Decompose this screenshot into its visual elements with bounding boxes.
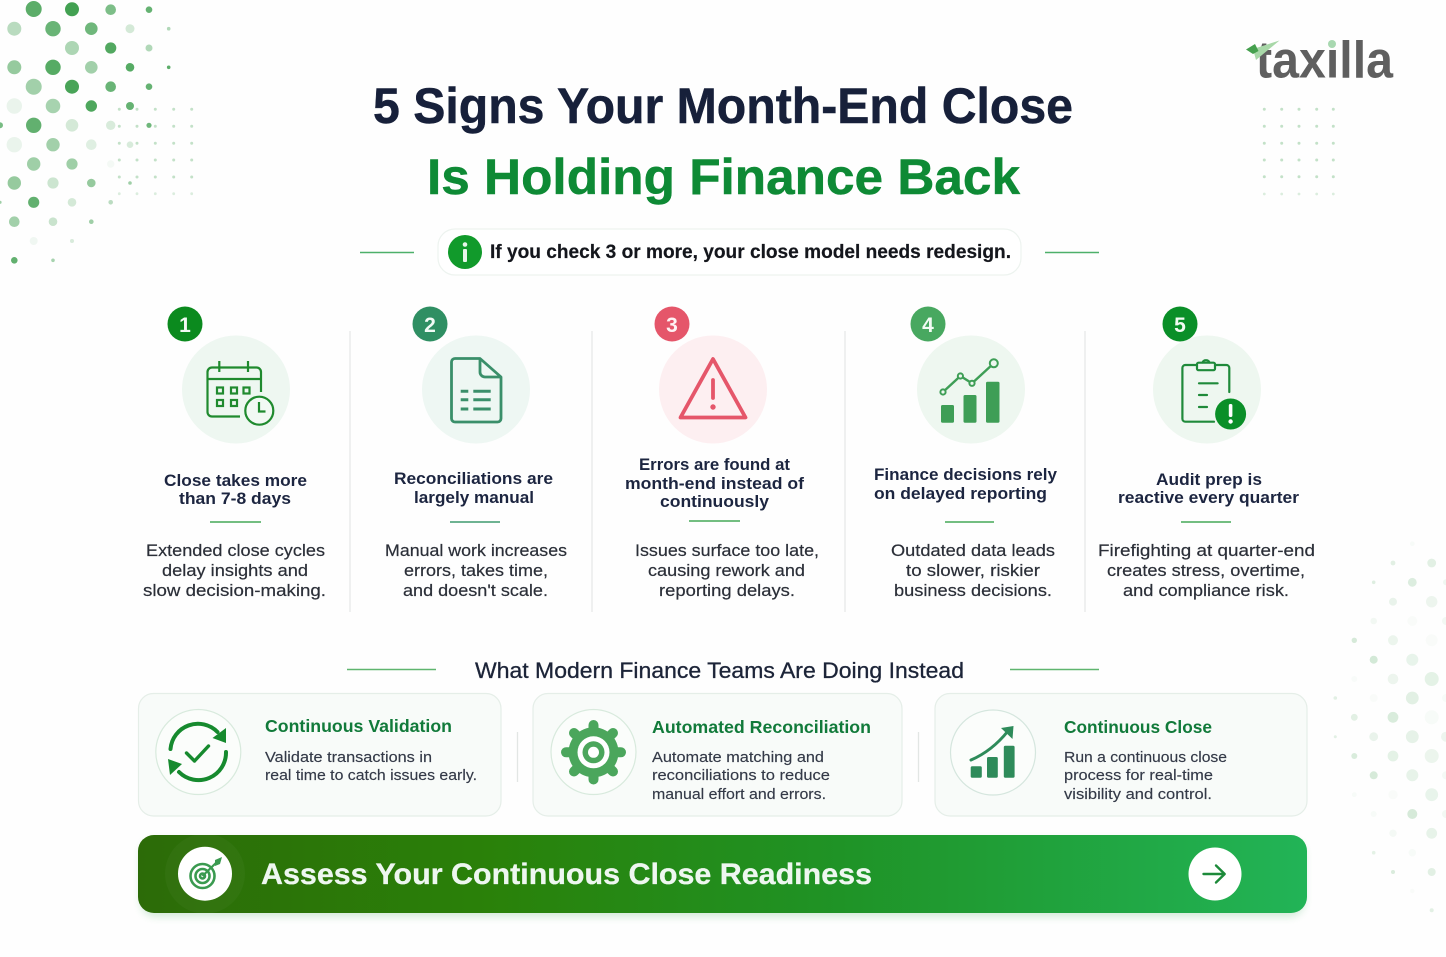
description: and compliance risk.: [1123, 581, 1289, 600]
description: Issues surface too late,: [635, 541, 819, 560]
description: [143, 541, 326, 600]
card text: manual effort and errors.: [652, 786, 826, 803]
heading: Reconciliations are: [394, 469, 553, 488]
icon: document: [452, 358, 501, 422]
number badge 3: 3: [666, 314, 678, 337]
description: [891, 541, 1055, 600]
title: [373, 78, 1073, 205]
card text: visibility and control.: [1064, 786, 1212, 803]
description: reporting delays.: [659, 581, 795, 600]
panel: sign 1: [143, 306, 326, 600]
heading: [394, 469, 553, 507]
card text: reconciliations to reduce: [652, 767, 830, 784]
title: Is Holding Finance Back: [427, 149, 1020, 205]
heading: [164, 471, 307, 508]
description: and doesn't scale.: [403, 581, 548, 600]
description: business decisions.: [894, 581, 1052, 600]
description: [1098, 541, 1315, 600]
logo: taxilla: taxilla: [1256, 32, 1394, 90]
panel: continuous close: [935, 694, 1307, 816]
icon: arrow button: [1188, 848, 1242, 900]
card dividers: [518, 732, 918, 782]
heading: largely manual: [414, 488, 534, 507]
dot pattern: bottom right: [1334, 541, 1446, 912]
heading: [1118, 470, 1299, 507]
callout: checklist threshold: If you check 3 or more, your close model needs redesign.: [490, 242, 1011, 263]
icon: gear: [551, 710, 636, 794]
number badge 1: 1: [179, 314, 191, 337]
dot pattern: top left: [0, 1, 193, 264]
dot pattern: top right: [1263, 108, 1335, 195]
heading: reactive every quarter: [1118, 488, 1299, 507]
description: Manual work increases: [385, 541, 567, 560]
card text: [1064, 749, 1227, 803]
heading: Close takes more: [164, 471, 307, 490]
panel: sign 5: [1098, 306, 1315, 600]
description: to slower, riskier: [906, 561, 1040, 580]
section heading: What Modern Finance Teams Are Doing Instead: [475, 658, 964, 683]
description: Extended close cycles: [146, 541, 325, 560]
number badge 4: 4: [922, 314, 934, 337]
heading: [874, 465, 1058, 503]
description: [635, 541, 819, 600]
card text: process for real-time: [1064, 767, 1213, 784]
description: slow decision-making.: [143, 581, 326, 600]
number badge 2: 2: [424, 314, 436, 337]
icon: calendar with clock: [208, 361, 273, 425]
icon: warning triangle: [680, 359, 746, 418]
description: creates stress, overtime,: [1107, 561, 1305, 580]
column dividers: [350, 331, 1085, 612]
number badge 5: 5: [1174, 314, 1186, 337]
description: Outdated data leads: [891, 541, 1055, 560]
card heading: Automated Reconciliation: [652, 717, 871, 737]
banner text: Assess Your Continuous Close Readiness: [261, 858, 872, 891]
panel: continuous validation: [138, 694, 501, 816]
icon: growth chart: [950, 710, 1036, 795]
description: errors, takes time,: [404, 561, 548, 580]
panel: sign 4: [874, 306, 1058, 600]
card text: Automate matching and: [652, 749, 824, 766]
panel: sign 2: [385, 306, 567, 600]
panel: sign 3: [625, 306, 819, 600]
icon: target: [178, 847, 232, 901]
description: delay insights and: [162, 561, 308, 580]
panel: automated reconciliation: [533, 694, 902, 816]
number badge 5: [1162, 306, 1198, 342]
heading: than 7-8 days: [179, 489, 291, 508]
number badge 2: [412, 306, 448, 342]
heading: Errors are found at: [639, 455, 790, 474]
callout: checklist threshold: [360, 229, 1099, 275]
card heading: Continuous Validation: [265, 716, 452, 736]
description: causing rework and: [648, 561, 805, 580]
card text: real time to catch issues early.: [265, 767, 477, 784]
heading: on delayed reporting: [874, 484, 1047, 503]
description: [385, 541, 567, 600]
card text: Run a continuous close: [1064, 749, 1227, 766]
call to action banner: [138, 834, 1307, 917]
heading: month-end instead of: [625, 474, 804, 493]
heading: Audit prep is: [1156, 470, 1262, 489]
heading: [625, 455, 804, 511]
heading: continuously: [660, 492, 770, 511]
heading: Finance decisions rely: [874, 465, 1058, 484]
title: 5 Signs Your Month-End Close: [373, 78, 1073, 134]
icon: clipboard with alert: [1182, 360, 1246, 430]
card heading: Continuous Close: [1064, 717, 1212, 737]
number badge 3: [654, 306, 690, 342]
card text: [652, 749, 830, 803]
description: Firefighting at quarter-end: [1098, 541, 1315, 560]
card text: [265, 749, 477, 784]
card text: Validate transactions in: [265, 749, 432, 766]
icon: sync check: [156, 710, 241, 794]
icon: bar and line chart: [940, 359, 1000, 423]
number badge 4: [910, 306, 946, 342]
number badge 1: [168, 306, 202, 342]
